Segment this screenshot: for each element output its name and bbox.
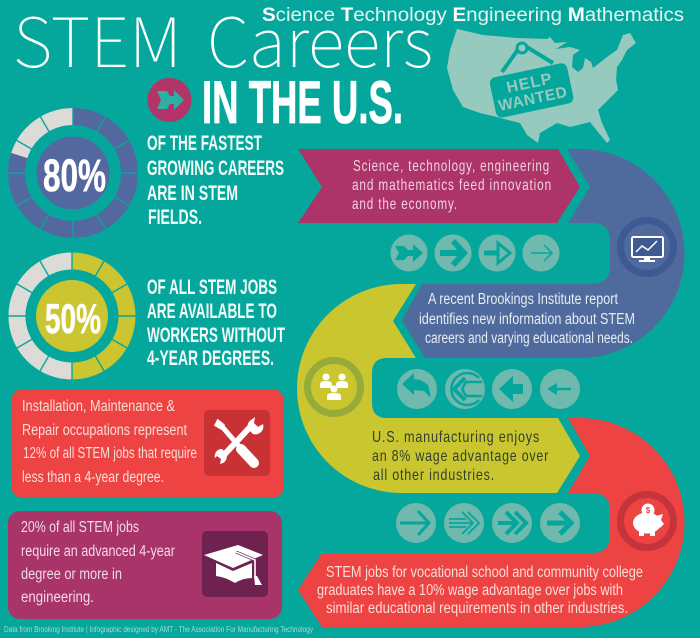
footer credit: Data from Brooking Institute | Infographic designed by AMT - The Association For Manufacturing Technology [4,625,313,634]
icon: monitor with line chart [620,220,674,274]
text: 50% stat description: ARE AVAILABLE TO [147,299,277,323]
text: blue ribbon copy: identifies new information about STEM [419,311,635,328]
text: 80% stat description [147,131,284,229]
text: repair occupations copy: Installation, Maintenance & [22,398,176,415]
text: repair occupations copy: Repair occupations represent [22,422,188,439]
text: repair occupations copy: less than a 4-year degree. [22,469,164,486]
icon: piggy bank: $ [646,506,651,515]
icon: arrow badge [148,78,192,122]
panel: advanced degree [8,511,282,619]
icon: piggy bank [620,494,674,548]
text: advanced degree copy: require an advanced 4-year [21,543,175,560]
text: purple banner copy: and the economy. [352,196,458,213]
arrow row: top [390,234,560,272]
text: purple banner copy: Science, technology, engineering [353,158,550,175]
panel: purple banner [298,149,580,223]
chart: 80% donut: 80% [43,150,106,201]
text: repair occupations copy: 12% of all STEM jobs that require [23,445,197,462]
text: yellow ribbon copy: all other industries. [373,467,495,484]
text: repair occupations copy [22,398,197,486]
panel: red ribbon [298,418,684,627]
text: 80% stat description: OF THE FASTEST [147,131,262,155]
text: purple banner copy [352,158,552,213]
text: 50% stat description: WORKERS WITHOUT [147,323,285,347]
chart: 50% donut [8,252,136,380]
text: red ribbon copy: similar educational requirements in other industries. [326,600,628,617]
map of the United States [447,29,636,143]
icon: US map with help wanted sign [447,29,636,143]
text: red ribbon copy: graduates have a 10% wage advantage over jobs with [317,582,623,599]
heading: IN THE U.S.: IN THE U.S. [202,69,403,136]
text: advanced degree copy [21,519,175,606]
panel: repair occupations [11,389,284,498]
text: advanced degree copy: 20% of all STEM jobs [21,519,139,536]
text: 80% stat description: GROWING CAREERS [147,156,284,180]
text: advanced degree copy: engineering. [21,589,94,606]
text: yellow ribbon copy [372,429,549,484]
text: blue ribbon copy: A recent Brookings Institute report [428,291,619,308]
text: red ribbon copy: STEM jobs for vocational school and community college [326,564,643,581]
arrow row: middle [397,369,580,409]
help wanted sign: HELP [505,70,554,97]
text: advanced degree copy: degree or more in [21,566,122,583]
text: 50% stat description: OF ALL STEM JOBS [147,275,277,299]
text: blue ribbon copy [419,291,635,347]
text: 50% stat description [147,275,285,370]
chart: 80% donut [8,107,138,239]
chart: 50% donut: 50% [45,295,101,342]
text: yellow ribbon copy: an 8% wage advantage over [372,448,549,465]
text: yellow ribbon copy: U.S. manufacturing enjoys [372,429,540,446]
header: Science Technology Engineering Mathematics: Science Technology Engineering Mathematics [262,5,684,26]
text: 50% stat description: 4-YEAR DEGREES. [147,346,274,370]
icon: graduation cap [202,531,268,597]
text: 80% stat description: ARE IN STEM [147,181,238,205]
title: STEM Careers [13,0,433,87]
arrow row: bottom [396,503,580,543]
panel: yellow ribbon [297,284,580,493]
icon: wrench and screwdriver [204,410,270,476]
panel: blue ribbon [402,149,684,358]
text: purple banner copy: and mathematics feed innovation [352,177,552,194]
text: 80% stat description: FIELDS. [148,205,202,229]
help wanted sign [489,43,574,119]
text: red ribbon copy [317,564,643,617]
help wanted sign: WANTED [497,84,569,115]
text: blue ribbon copy: careers and varying educational needs. [425,330,633,347]
icon: three people [308,360,360,414]
